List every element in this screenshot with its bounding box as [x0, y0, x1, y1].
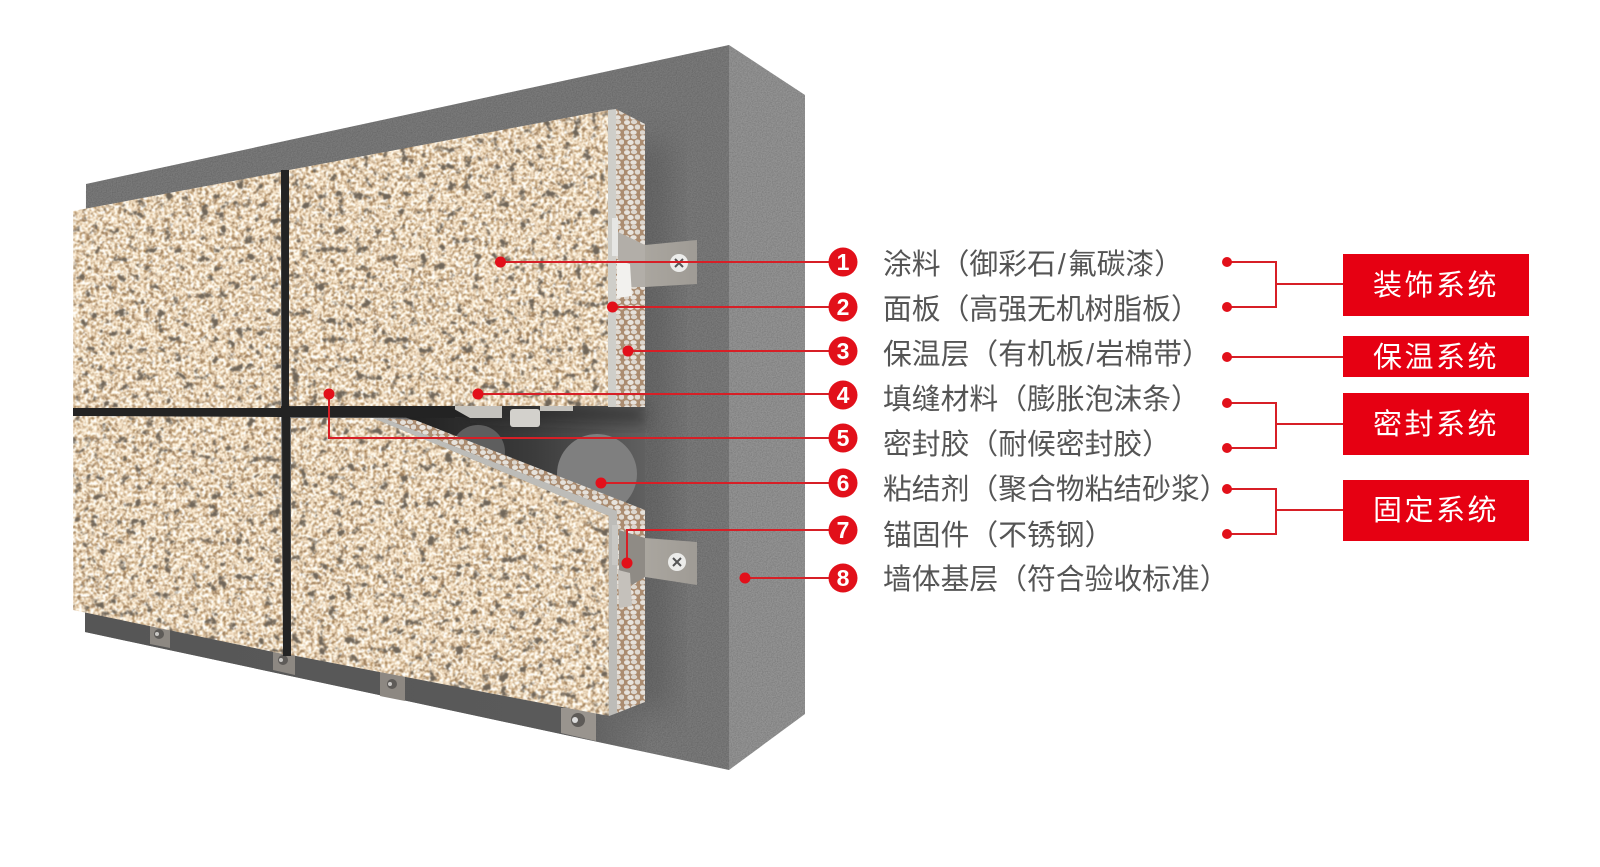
bracket: sealing system: [1222, 398, 1343, 453]
box: insulation system: 保温系统: [1373, 341, 1499, 374]
callout 6: [596, 468, 858, 498]
label 2: 面板（高强无机树脂板）: [883, 294, 1200, 326]
callout 7: 7: [837, 517, 849, 543]
callout 6: 6: [837, 470, 849, 496]
adhesive dots: [451, 425, 637, 514]
callout 5: [324, 388, 858, 452]
label 7: 锚固件（不锈钢）: [883, 520, 1113, 552]
box: insulation system: [1343, 336, 1529, 377]
bracket: fixing system: [1222, 484, 1343, 539]
box: sealing system: [1343, 393, 1529, 455]
connector: insulation system: [1222, 352, 1343, 362]
label 5: 密封胶（耐候密封胶）: [883, 429, 1171, 461]
box: sealing system: 密封系统: [1373, 408, 1499, 441]
box: decoration system: [1343, 254, 1529, 316]
box: fixing system: [1343, 480, 1529, 541]
label 4: 填缝材料（膨胀泡沫条）: [883, 384, 1200, 416]
callout 3: [622, 336, 858, 366]
callout 5: 5: [837, 425, 850, 451]
callout 3: 3: [837, 338, 849, 364]
label 6: 粘结剂（聚合物粘结砂浆）: [883, 474, 1229, 506]
callout 4: [472, 380, 858, 410]
callout 8: 8: [837, 565, 850, 591]
label 3: 保温层（有机板/岩棉带）: [883, 339, 1211, 371]
bottom fixing tabs: [150, 625, 596, 741]
callout 4: 4: [837, 382, 850, 408]
bracket: decoration system: [1222, 257, 1343, 312]
callout 1: [495, 248, 858, 276]
callout 2: [607, 292, 858, 322]
granite faced panels: [73, 110, 609, 716]
callout 1: 1: [837, 249, 850, 275]
label 8: 墙体基层（符合验收标准）: [883, 564, 1229, 596]
wall base layer: [85, 45, 805, 770]
box: decoration system: 装饰系统: [1373, 269, 1499, 302]
callout 7: [622, 516, 858, 568]
panel: board edge, upper: [608, 109, 616, 407]
box: fixing system: 固定系统: [1373, 494, 1499, 527]
panel joints: [73, 170, 470, 656]
hardware under upper panel: [455, 406, 573, 427]
panel: insulation foam edge, upper: [616, 109, 645, 407]
callout 8: [740, 564, 858, 592]
lower anchor bracket: [612, 525, 697, 608]
callout 2: 2: [837, 294, 849, 320]
label 1: 涂料（御彩石/氟碳漆）: [883, 249, 1183, 281]
panel: insulation foam edge, lower: [383, 418, 645, 713]
panel: board edge, lower: [373, 418, 617, 716]
upper anchor bracket: [612, 218, 697, 298]
